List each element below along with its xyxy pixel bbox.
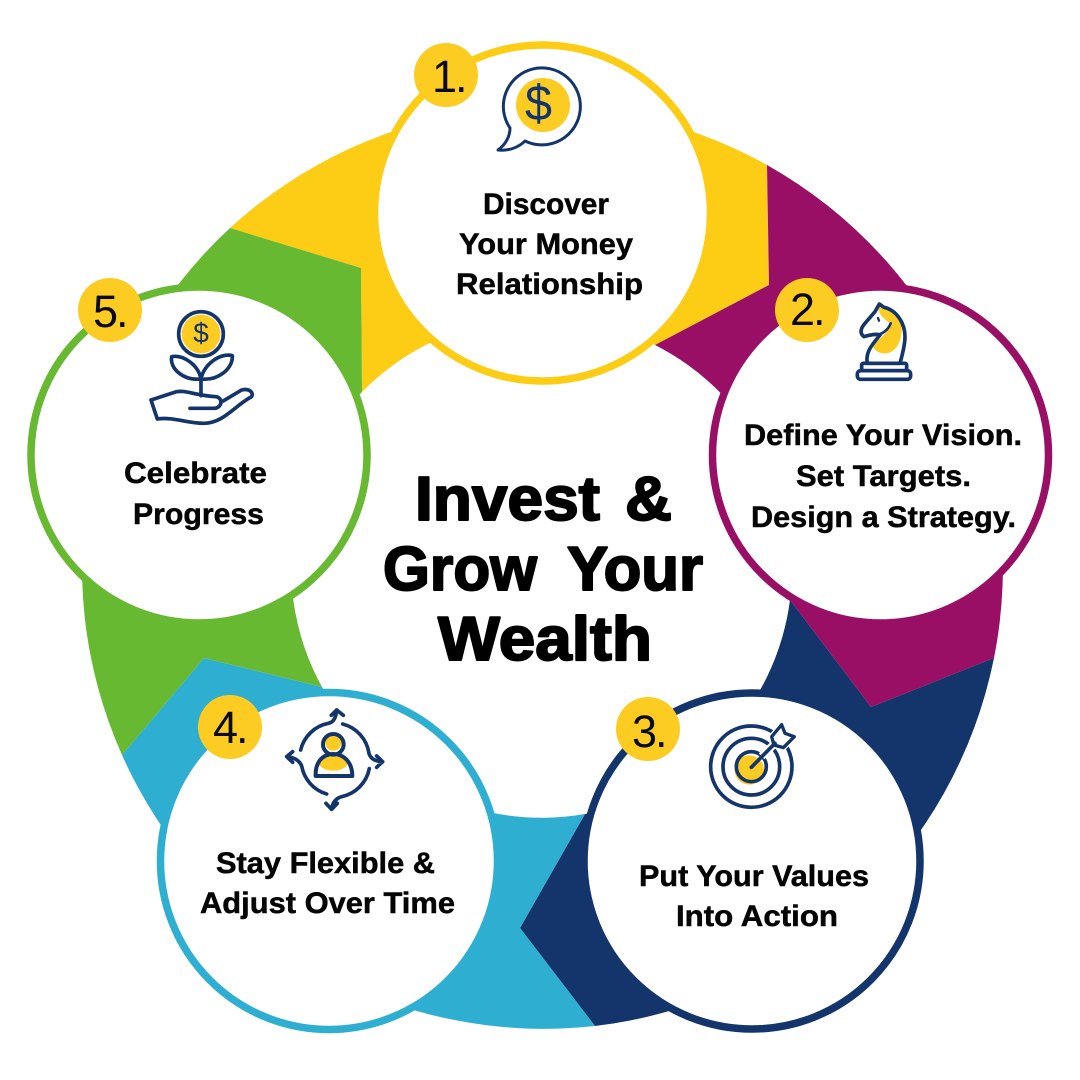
step 2 label [744, 419, 1022, 534]
step 2 number badge [775, 278, 839, 342]
panel: step 1 [374, 43, 710, 381]
step 4 number badge: 4. [213, 702, 247, 753]
step 2 label: Set Targets. [796, 460, 971, 493]
step 1 label [456, 188, 643, 301]
step 1 number badge: 1. [432, 51, 466, 102]
panel: step 2 [712, 278, 1048, 623]
ring segment: green [82, 228, 362, 755]
step 2 label: Define Your Vision. [744, 419, 1022, 452]
title [383, 465, 703, 674]
icon: target with dart [711, 725, 794, 807]
ring segment: purple [655, 165, 1003, 707]
title: Grow [383, 535, 538, 604]
icon: hand holding coin plant: $ [193, 318, 209, 349]
step 5 label: Progress [133, 498, 264, 531]
icon: speech bubble with dollar [498, 68, 580, 150]
step 3 label: Into Action [676, 900, 838, 933]
step 4 label: Adjust Over Time [200, 887, 455, 920]
title: Invest [415, 465, 600, 534]
title: & [625, 465, 672, 534]
panel: step 4 [160, 692, 498, 1030]
step 3 number badge: 3. [632, 706, 666, 757]
icon: speech bubble with dollar: $ [525, 75, 552, 131]
step 4 number badge [198, 695, 262, 759]
ring segment: yellow [230, 107, 769, 392]
icon: hand holding coin plant [151, 312, 252, 423]
icon: chess knight [857, 304, 911, 379]
title: Wealth [438, 605, 652, 674]
step 5 number badge: 5. [93, 286, 127, 337]
icon: person with cycle arrows [287, 710, 383, 809]
step 2 label: Design a Strategy. [751, 501, 1016, 534]
title: Your [567, 535, 703, 604]
step 5 label: Celebrate [124, 457, 267, 490]
step 1 number badge [414, 43, 478, 107]
ring segment: navy [520, 600, 994, 1026]
step 1 label: Your Money [459, 228, 633, 261]
step 5 number badge [78, 278, 142, 342]
ring segment: blue [122, 658, 595, 1029]
panel: step 5 [31, 278, 367, 623]
panel: step 3 [584, 693, 920, 1029]
step 3 label [639, 860, 869, 933]
step 1 label: Relationship [456, 268, 643, 301]
step 4 label: Stay Flexible & [216, 847, 435, 880]
step 3 number badge [616, 697, 680, 761]
step 4 label [200, 847, 455, 920]
step 3 label: Put Your Values [639, 860, 869, 893]
step 1 label: Discover [483, 188, 609, 221]
step 5 label [124, 457, 267, 531]
step 2 number badge: 2. [790, 284, 824, 335]
